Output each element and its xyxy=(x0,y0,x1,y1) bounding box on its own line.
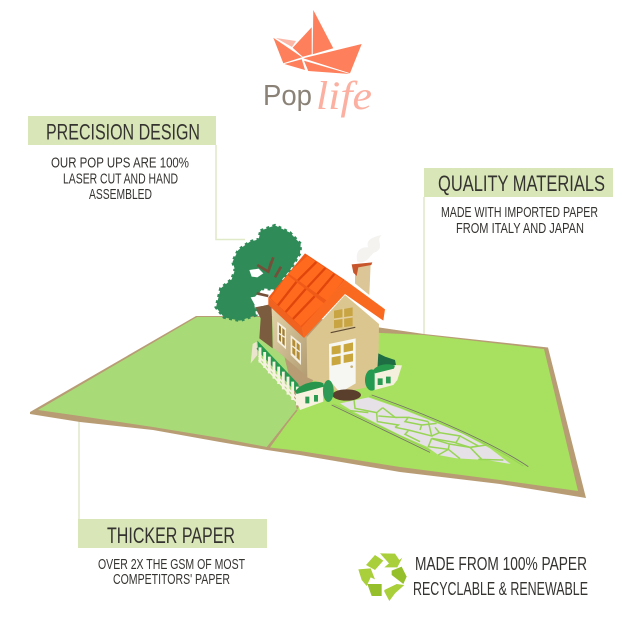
text: precision description: ASSEMBLED xyxy=(89,187,152,203)
text: precision description: OUR POP UPS ARE 100% xyxy=(51,156,189,172)
front door xyxy=(329,338,356,393)
side wall xyxy=(272,308,307,377)
panel: precision design xyxy=(28,116,216,203)
text: paper description xyxy=(98,557,245,588)
doormat xyxy=(332,389,361,401)
panel: recyclable xyxy=(358,553,588,601)
card: kraft backing xyxy=(30,316,586,498)
chimney xyxy=(352,262,372,295)
text: materials description xyxy=(441,205,598,237)
roof xyxy=(268,253,385,338)
logo: Poplife xyxy=(263,10,372,118)
text: paper description: COMPETITORS' PAPER xyxy=(113,572,230,588)
card: left green panel xyxy=(38,317,297,447)
roof slope base xyxy=(268,253,345,328)
tree gaps and branches xyxy=(249,269,263,277)
text: materials description: FROM ITALY AND JAPAN xyxy=(456,221,584,237)
pop-up house illustration xyxy=(216,225,402,410)
tree trunk xyxy=(255,304,273,348)
side windows xyxy=(277,322,301,365)
card: right green panel xyxy=(270,331,578,491)
text: precision description xyxy=(51,156,189,203)
left fence xyxy=(251,341,334,410)
heading: thicker paper: THICKER PAPER xyxy=(107,523,235,548)
logo wordmark: Pop: Pop xyxy=(263,80,312,112)
fence pickets xyxy=(260,347,297,405)
tree xyxy=(216,225,301,348)
text: paper description: OVER 2X THE GSM OF MOST xyxy=(98,557,245,573)
panel: quality materials xyxy=(424,168,613,237)
heading: precision design: PRECISION DESIGN xyxy=(46,120,200,144)
text: recyclable statement xyxy=(413,554,588,599)
pop-up card base xyxy=(30,316,586,498)
bush xyxy=(323,380,334,402)
front wall xyxy=(307,295,379,393)
tree canopy xyxy=(216,225,301,321)
attic window xyxy=(331,307,355,333)
logo wordmark: life: life xyxy=(316,73,372,118)
icon: origami boat xyxy=(273,10,362,74)
roof front trim xyxy=(302,280,385,338)
roof upper bay xyxy=(288,256,343,301)
fence green backing xyxy=(257,341,300,397)
right fence xyxy=(365,353,402,391)
stone path xyxy=(332,395,528,467)
icon: recycling arrows xyxy=(358,553,407,601)
panel: thicker paper xyxy=(78,519,267,588)
smoke xyxy=(357,235,382,263)
roof lower bay xyxy=(271,275,324,326)
text: precision description: LASER CUT AND HAND xyxy=(63,172,178,188)
